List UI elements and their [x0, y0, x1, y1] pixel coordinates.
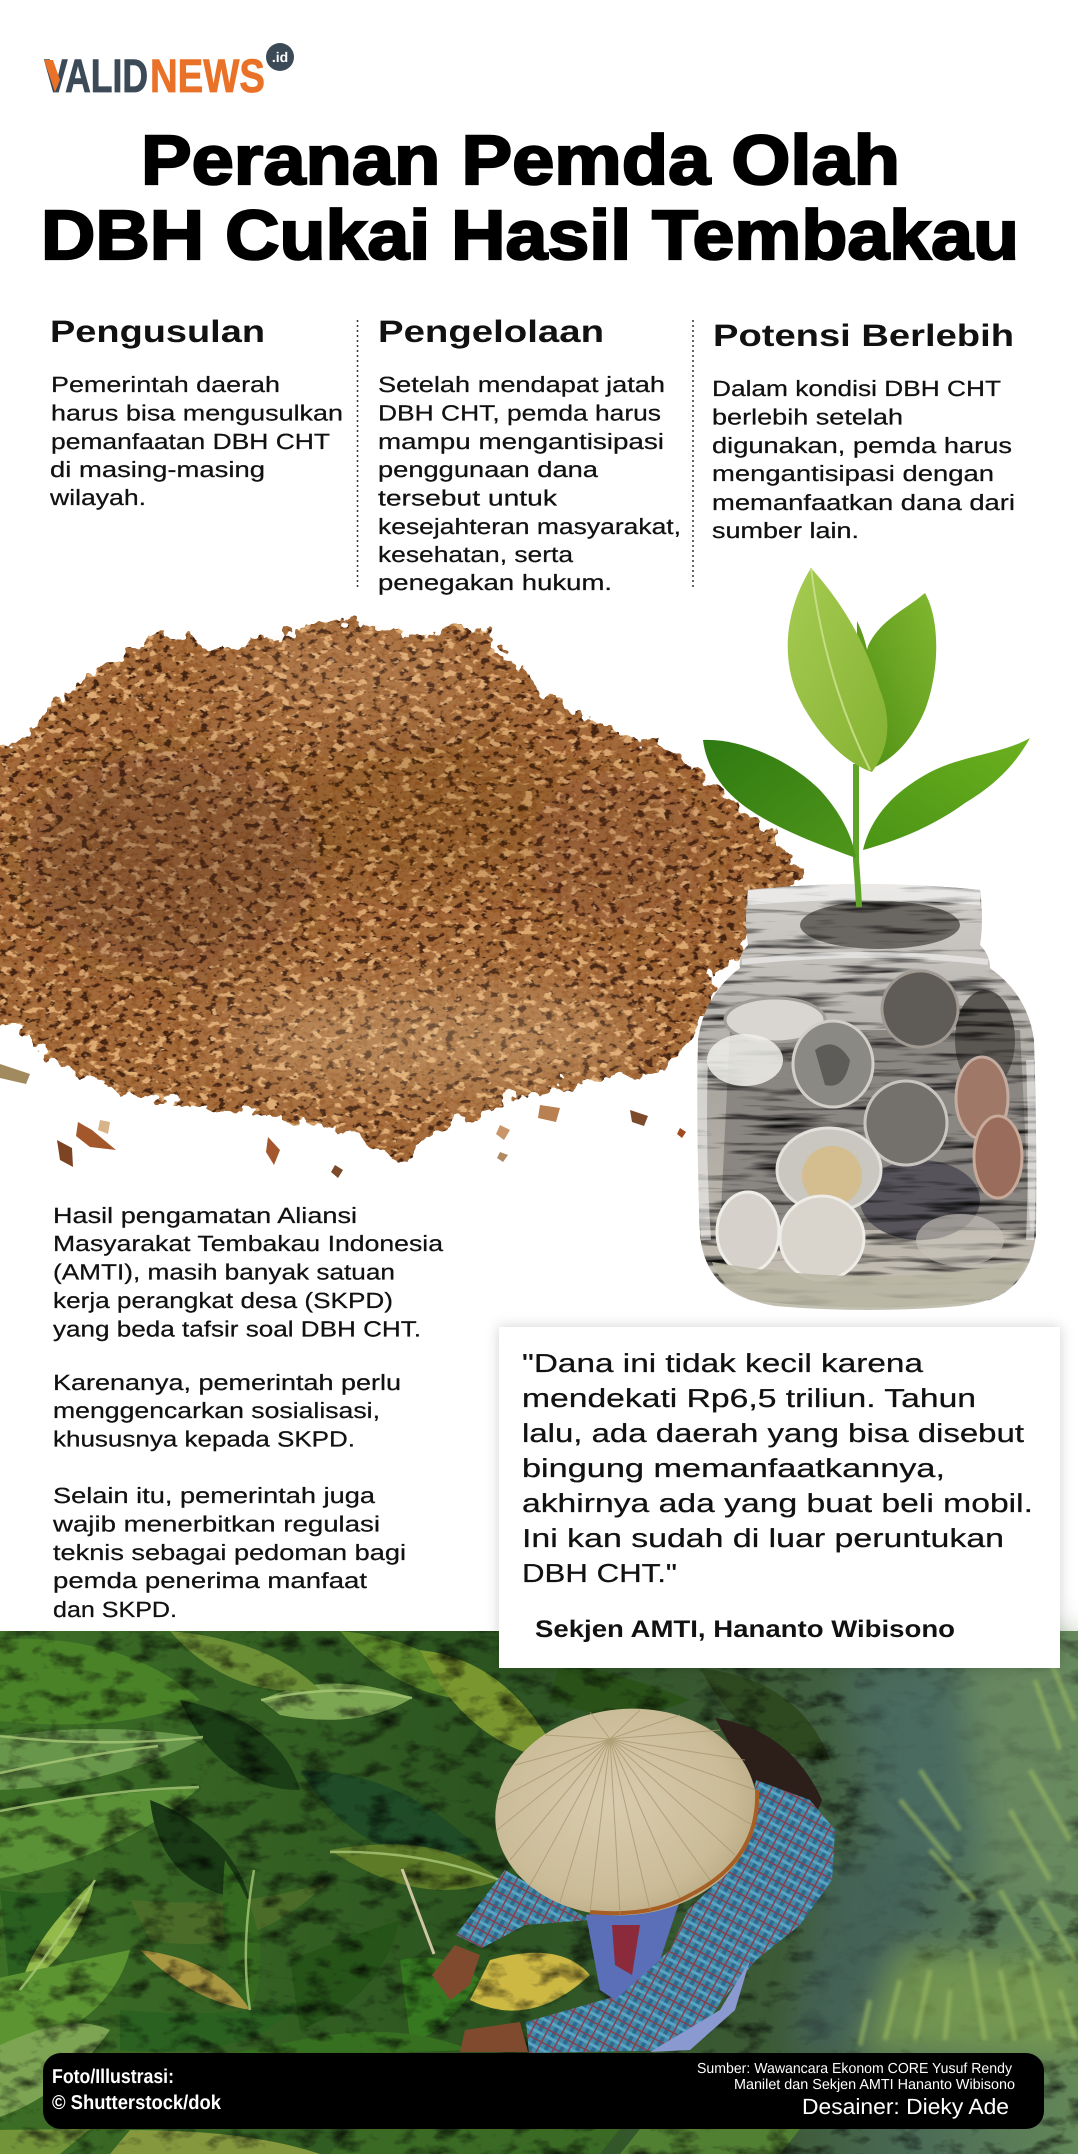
glass edges: [702, 955, 1032, 1240]
text block: analysis: Selain itu, pemerintah juga: [53, 1483, 376, 1508]
photo credit: © Shutterstock/dok: [52, 2092, 222, 2114]
coins: [707, 962, 1022, 1280]
heading: Pengusulan: [50, 314, 265, 349]
text block: analysis: yang beda tafsir soal DBH CHT.: [53, 1316, 421, 1342]
logo wordmark: [44, 49, 265, 102]
text block: analysis: kerja perangkat desa (SKPD): [53, 1288, 393, 1313]
logo: [44, 43, 294, 102]
panel: potensi berlebih: [712, 318, 1015, 543]
quote text: "Dana ini tidak kecil karena: [522, 1348, 924, 1378]
hair: [715, 1718, 822, 1830]
text block: analysis: Hasil pengamatan Aliansi: [53, 1203, 357, 1228]
text block: analysis: Masyarakat Tembakau Indonesia: [53, 1231, 444, 1256]
back leaf: [862, 593, 936, 768]
text block: analysis: khususnya kepada SKPD.: [53, 1426, 355, 1452]
stick: [402, 1869, 434, 1954]
text block: analysis: teknis sebagai pedoman bagi: [53, 1540, 406, 1565]
text block: Setelah mendapat jatah: [378, 372, 665, 397]
text block: Dalam kondisi DBH CHT: [712, 376, 1001, 401]
right leaf: [863, 738, 1030, 850]
quote text: bingung memanfaatkannya,: [522, 1453, 945, 1483]
conical hat: [485, 1696, 767, 1928]
text block: harus bisa mengusulkan: [51, 400, 343, 426]
text block: memanfaatkan dana dari: [712, 490, 1015, 515]
plant sprout illustration: [703, 568, 1030, 907]
tobacco leaves: [0, 1631, 1078, 2154]
pile shading: [20, 640, 710, 1090]
panel: pengelolaan: [378, 314, 681, 595]
photo credit: Foto/Illustrasi:: [52, 2066, 174, 2088]
text block: [712, 376, 1015, 543]
left leaf: [703, 740, 856, 858]
text block: pemanfaatan DBH CHT: [51, 429, 330, 454]
heading: Potensi Berlebih: [713, 318, 1014, 353]
text block: analysis: dan SKPD.: [53, 1597, 177, 1622]
panel: pengusulan: [49, 314, 343, 510]
glass base: [712, 1262, 1026, 1310]
text block: DBH CHT, pemda harus: [378, 400, 661, 426]
text block: [378, 372, 681, 595]
source: [697, 2061, 1015, 2093]
text block: analysis: menggencarkan sosialisasi,: [53, 1398, 380, 1423]
text block: di masing-masing: [50, 457, 265, 482]
quote text: [522, 1348, 1033, 1588]
text block: analysis: wajib menerbitkan regulasi: [52, 1512, 380, 1536]
text block: mampu mengantisipasi: [378, 429, 664, 454]
text block: digunakan, pemda harus: [712, 433, 1012, 458]
narrow leaf: [857, 621, 872, 700]
tobacco pile illustration: [0, 618, 800, 1178]
text block: analysis: Karenanya, pemerintah perlu: [53, 1370, 401, 1395]
logo badge: .id: [272, 49, 288, 65]
logo accent: [44, 60, 60, 92]
logo badge: [266, 43, 294, 71]
text block: Pemerintah daerah: [51, 372, 280, 397]
glass neck highlight: [748, 884, 980, 905]
title: Peranan Pemda Olah: [141, 121, 900, 199]
text block: penggunaan dana: [378, 457, 599, 482]
logo wordmark: VALID: [44, 49, 148, 102]
farmer photo illustration: [0, 1631, 1078, 2154]
quote text: Ini kan sudah di luar peruntukan: [522, 1523, 1004, 1553]
photo background: [0, 1631, 1078, 2154]
source: Sumber: Wawancara Ekonom CORE Yusuf Rendy: [697, 2061, 1013, 2077]
text block: kesehatan, serta: [378, 542, 574, 567]
jar body with coins: [697, 884, 1036, 1308]
text block: [49, 372, 343, 510]
quote text: DBH CHT.": [522, 1558, 677, 1588]
loose flakes: [0, 1064, 686, 1178]
leaf midribs: [0, 1690, 500, 2010]
large leaf midrib: [811, 568, 870, 770]
text block: analysis: (AMTI), masih banyak satuan: [53, 1260, 395, 1284]
quote card: [499, 1327, 1060, 1668]
logo wordmark: NEWS: [150, 49, 265, 102]
heading: Pengelolaan: [378, 314, 604, 349]
text block: analysis: pemda penerima manfaat: [53, 1568, 367, 1593]
stem: [856, 764, 859, 907]
photo credit: [52, 2066, 222, 2114]
quote text: mendekati Rp6,5 triliun. Tahun: [522, 1383, 976, 1413]
text block: mengantisipasi dengan: [712, 461, 994, 486]
text block: wilayah.: [49, 485, 146, 510]
quote text: akhirnya ada yang buat beli mobil.: [522, 1488, 1033, 1518]
text block: kesejahteran masyarakat,: [378, 514, 681, 539]
hands: [432, 1945, 528, 2052]
smoky right side: [790, 1631, 1078, 2054]
coin jar illustration: [697, 884, 1036, 1310]
large light leaf: [788, 568, 887, 772]
quote attribution: Sekjen AMTI, Hananto Wibisono: [535, 1616, 955, 1643]
text block: analysis: [52, 1203, 444, 1622]
card background: [499, 1327, 1060, 1668]
title: DBH Cukai Hasil Tembakau: [41, 196, 1019, 274]
title: [41, 121, 1019, 274]
bar background: [43, 2053, 1044, 2129]
footer bar: [43, 2053, 1044, 2129]
pile body: [0, 618, 800, 1160]
quote text: lalu, ada daerah yang bisa disebut: [522, 1418, 1025, 1448]
designer credit: Desainer: Dieky Ade: [802, 2094, 1009, 2119]
drying leaf strips: [860, 1660, 1075, 2045]
text block: sumber lain.: [712, 518, 859, 543]
shirt: [456, 1780, 835, 2053]
text block: berlebih setelah: [712, 404, 903, 430]
text block: tersebut untuk: [378, 486, 558, 510]
source: Manilet dan Sekjen AMTI Hananto Wibisono: [734, 2077, 1015, 2093]
text block: penegakan hukum.: [378, 570, 612, 595]
